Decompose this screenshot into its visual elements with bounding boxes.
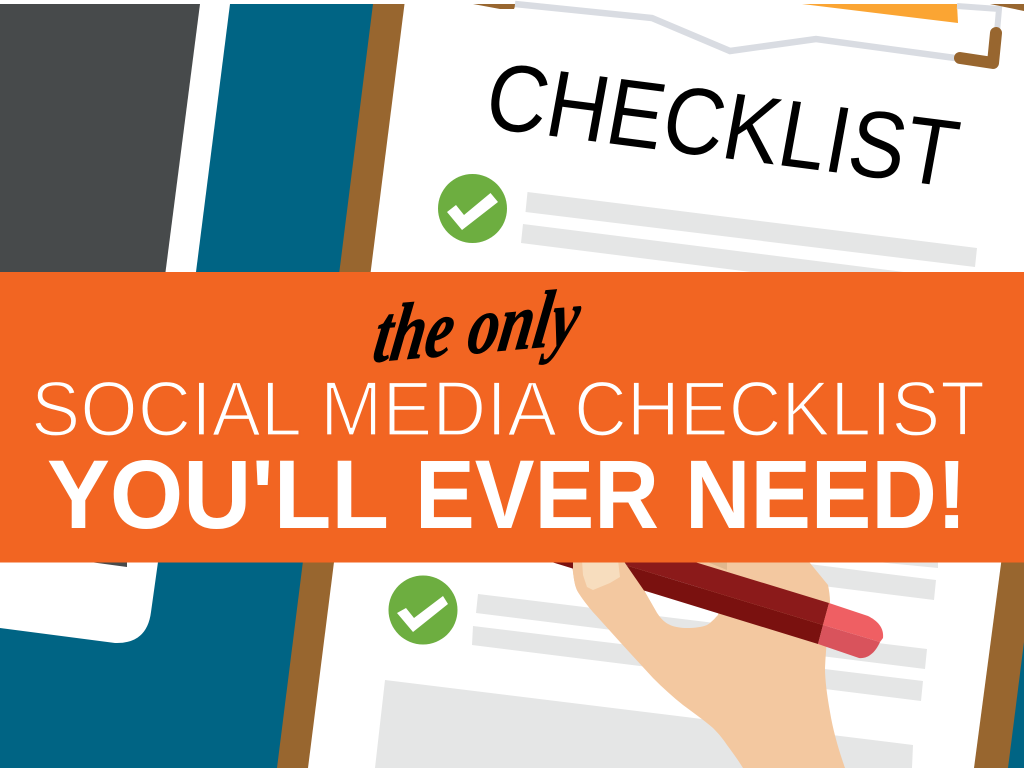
tablet: dark screen (0, 4, 200, 567)
title line: SOCIAL MEDIA CHECKLIST: SOCIAL (31, 364, 302, 452)
title line: YOU'LL EVER NEED!: NEED! (685, 440, 967, 549)
orange title banner (0, 272, 1024, 562)
title line: SOCIAL MEDIA CHECKLIST (31, 364, 985, 452)
heading: CHECKLIST: CHECKLIST (478, 43, 966, 208)
clipboard: brown board (277, 4, 1024, 768)
hand: shadow above pen (690, 555, 727, 570)
icon: green check bottom (388, 576, 458, 644)
text placeholder bars top (521, 192, 977, 300)
hand (570, 555, 845, 768)
clipboard: white paper (308, 4, 1024, 768)
hand: thumb over pen (573, 555, 670, 660)
title line: YOU'LL EVER NEED! (47, 440, 967, 549)
title line: YOU'LL EVER NEED!: YOU'LL (47, 440, 389, 549)
script heading: the only: the only (368, 271, 587, 380)
tablet: white body (0, 4, 230, 643)
title line: SOCIAL MEDIA CHECKLIST: MEDIA (320, 364, 557, 452)
title line: YOU'LL EVER NEED!: EVER (415, 440, 659, 549)
text placeholder bars bottom (375, 505, 938, 768)
icon: green check top (438, 174, 507, 243)
pen (545, 533, 883, 658)
clipboard clip (473, 4, 1024, 63)
title line: SOCIAL MEDIA CHECKLIST: CHECKLIST (574, 364, 985, 452)
